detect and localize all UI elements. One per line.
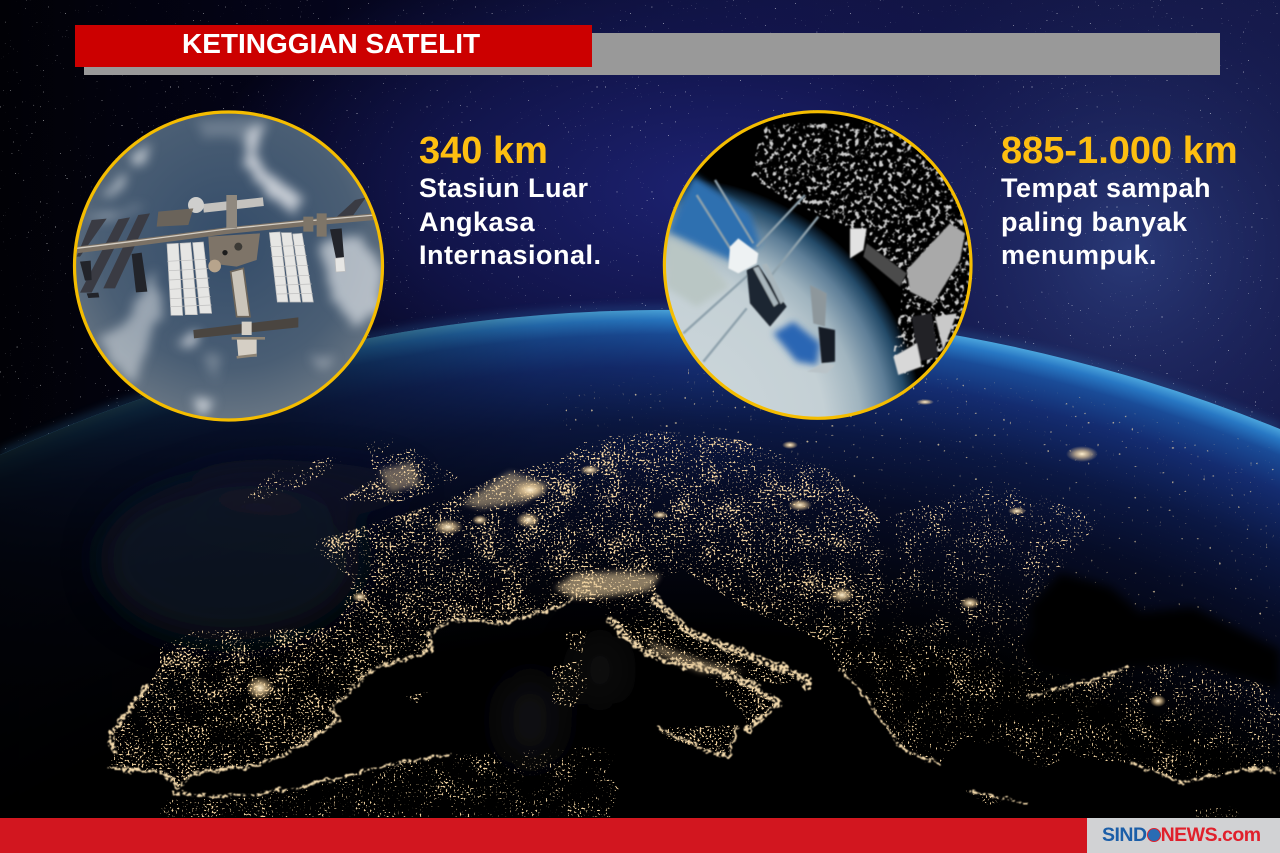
text: debris description: paling banyak <box>1001 206 1188 236</box>
text: station description <box>419 173 602 270</box>
ocean clouds <box>100 462 625 765</box>
sparse lights near horizon <box>540 365 1280 650</box>
satellite with booms <box>683 180 818 362</box>
circle photo: International Space Station <box>76 114 1165 800</box>
footer: logo panel <box>1087 818 1280 853</box>
text: 885-1.000 km heading: 885-1.000 km <box>1001 130 1238 172</box>
text: 340 km heading: 340 km <box>419 130 548 172</box>
space <box>0 0 1280 520</box>
circle photo: space debris <box>666 113 970 417</box>
header: red title bar <box>75 25 592 67</box>
text: station description: Stasiun Luar <box>419 173 589 203</box>
earth backdrop and clouds <box>70 110 387 423</box>
header: red title bar: KETINGGIAN SATELIT <box>182 28 480 59</box>
footer: logo panel: SIND NEWS.com <box>1102 824 1261 846</box>
text: debris description <box>1001 173 1211 270</box>
ISS truss and modules <box>77 195 375 357</box>
coast glow and bright cities <box>109 399 1280 803</box>
planet and atmosphere <box>666 113 970 417</box>
Earth globe <box>0 310 1280 853</box>
large debris structures <box>850 223 965 375</box>
text: debris description: Tempat sampah <box>1001 173 1211 203</box>
city lights: dense regions <box>109 430 880 787</box>
city lights: sparser regions <box>155 437 1280 817</box>
text: debris description: menumpuk. <box>1001 240 1157 270</box>
Po valley, Benelux, Ruhr and Thames glows <box>380 462 745 672</box>
footer: red bar <box>0 818 1087 853</box>
debris cloud <box>750 123 975 377</box>
Black Sea <box>1023 573 1280 690</box>
small satellite <box>807 285 835 373</box>
header: grey bar <box>84 33 1220 75</box>
text: station description: Internasional. <box>419 240 602 270</box>
ISS white solar arrays <box>167 232 345 315</box>
ISS solar arrays dark <box>77 197 366 298</box>
text: station description: Angkasa <box>419 206 535 236</box>
